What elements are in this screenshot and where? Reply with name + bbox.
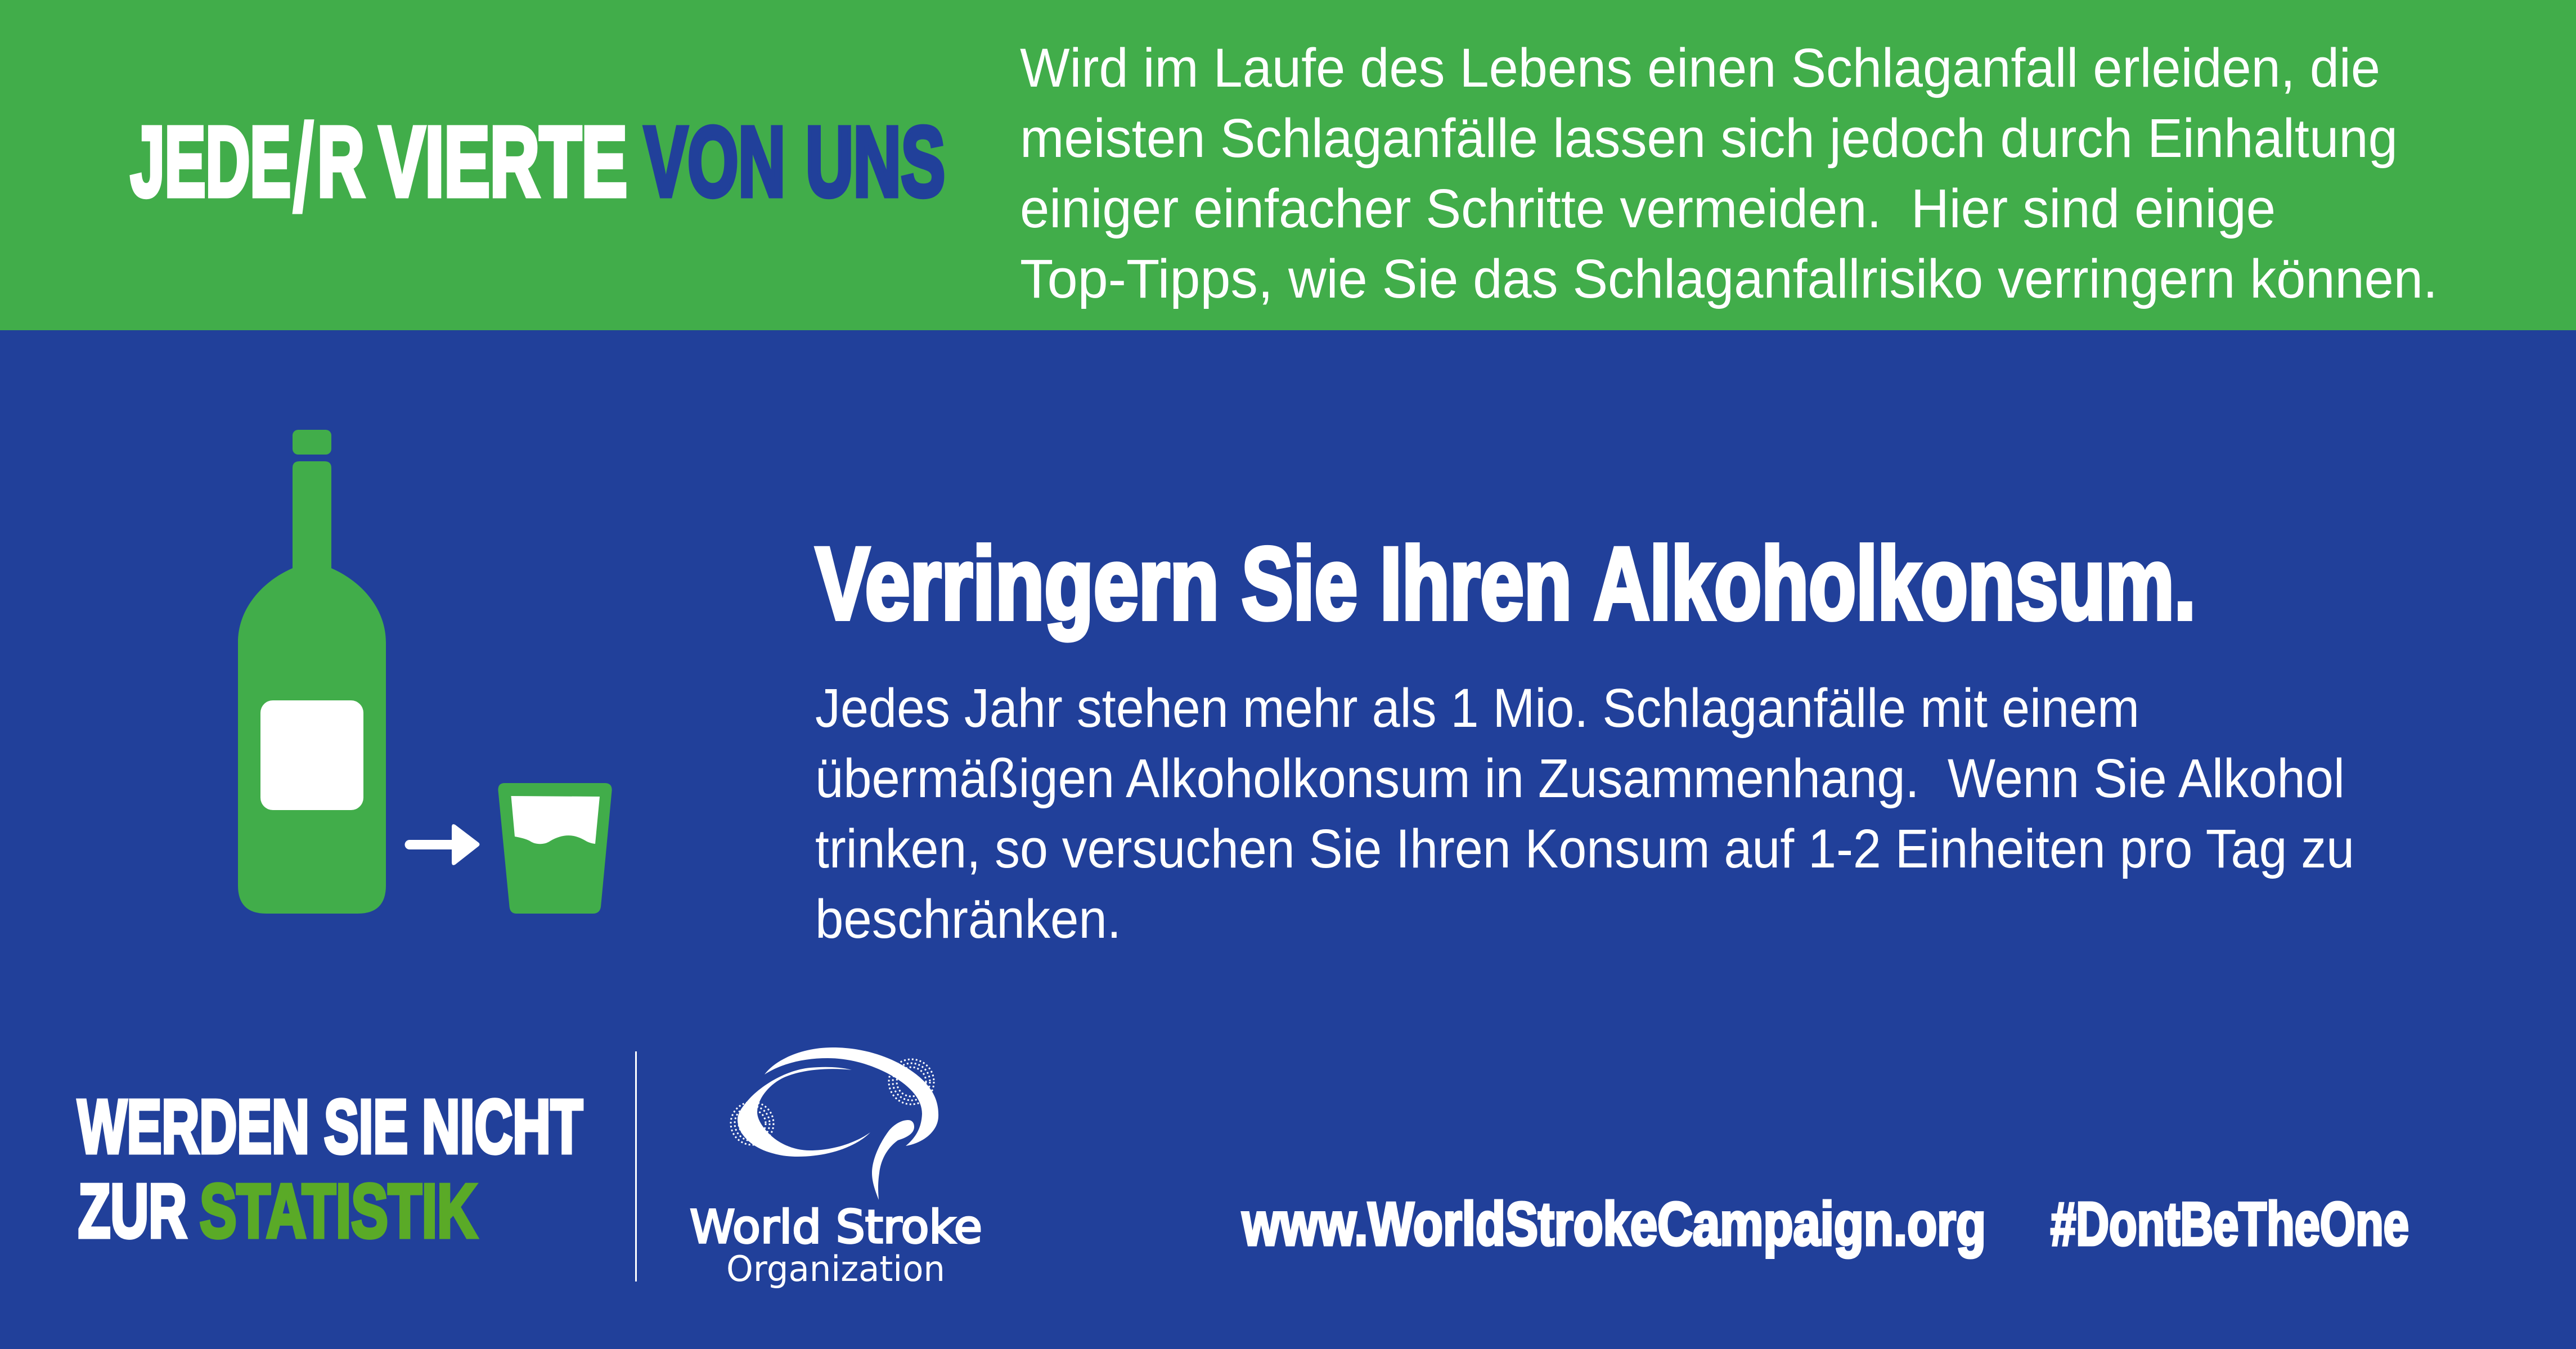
hashtag: #DontBeTheOne [2051, 1190, 2409, 1258]
body paragraph: trinken, so versuchen Sie Ihren Konsum auf 1-2 Einheiten pro Tag zu [815, 818, 2354, 879]
campaign slogan: SIE [324, 1084, 408, 1169]
header band [0, 0, 2576, 330]
campaign slogan: ZUR [78, 1168, 187, 1253]
heading: JEDE/R VIERTE VON UNS: JEDE [131, 107, 291, 217]
logo mark: brain [731, 1047, 938, 1200]
logo wordmark [690, 1201, 982, 1289]
main heading [816, 526, 2196, 641]
main heading: Sie [1242, 526, 1357, 641]
body paragraph: beschränken. [815, 888, 1121, 950]
intro text [1020, 37, 2438, 309]
panel: green header [0, 0, 2576, 330]
campaign slogan: WERDEN [78, 1084, 309, 1169]
intro text: einiger einfacher Schritte vermeiden. Hier sind einige [1020, 178, 2276, 239]
heading: JEDE/R VIERTE VON UNS: UNS [806, 107, 945, 217]
heading: JEDE/R VIERTE VON UNS: VON [644, 107, 785, 217]
logo: World Stroke Organization [690, 1047, 982, 1289]
website url: www.WorldStrokeCampaign.org [1242, 1190, 1986, 1258]
intro text: Wird im Laufe des Lebens einen Schlaganfall erleiden, die [1020, 37, 2380, 98]
intro text: wie Sie das Schlaganfallrisiko verringern können. [1288, 248, 2438, 309]
intro text: Top-Tipps, [1020, 248, 1273, 309]
logo wordmark: World Stroke [690, 1201, 982, 1254]
icon: wine bottle [238, 430, 386, 914]
heading: JEDE/R VIERTE VON UNS: / [291, 96, 315, 239]
icon: glass [498, 783, 612, 914]
main heading: Alkoholkonsum. [1594, 526, 2196, 641]
body paragraph: Jedes Jahr stehen mehr als 1 Mio. Schlaganfälle mit einem [815, 677, 2139, 739]
heading: JEDE/R VIERTE VON UNS [131, 96, 945, 239]
arrow: bottle to glass [405, 824, 479, 865]
heading: JEDE/R VIERTE VON UNS: VIERTE [379, 107, 627, 217]
campaign slogan: NICHT [422, 1084, 583, 1169]
body paragraph [815, 677, 2354, 950]
main heading: Verringern [816, 526, 1219, 641]
campaign slogan: STATISTIK [200, 1168, 477, 1253]
campaign slogan [78, 1084, 583, 1253]
intro text: meisten Schlaganfälle lassen sich jedoch durch Einhaltung [1020, 107, 2398, 169]
heading: JEDE/R VIERTE VON UNS: R [317, 107, 365, 217]
logo wordmark: Organization [726, 1248, 945, 1289]
divider [635, 1051, 637, 1281]
main heading: Ihren [1380, 526, 1572, 641]
body paragraph: übermäßigen Alkoholkonsum in Zusammenhang. Wenn Sie Alkohol [815, 748, 2345, 809]
